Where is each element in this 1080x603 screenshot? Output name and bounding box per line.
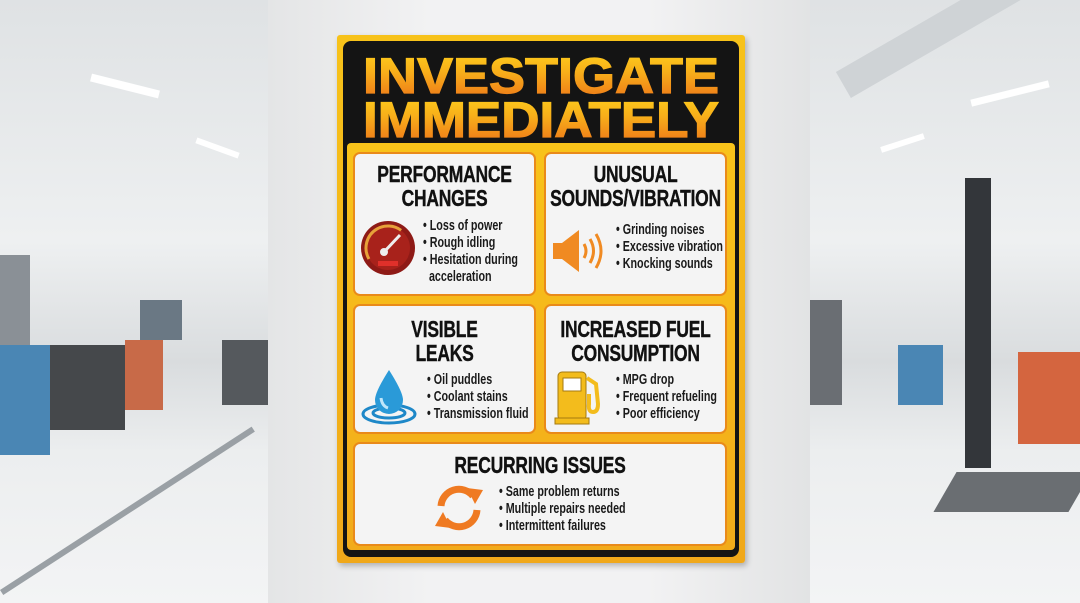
icon: water drop <box>362 370 416 424</box>
panel: unusual sounds <box>544 152 727 296</box>
bullet list: • Multiple repairs needed <box>499 501 626 517</box>
poster <box>337 35 745 563</box>
panel: unusual sounds: UNUSUAL <box>594 161 677 187</box>
panel: visible leaks <box>353 304 536 434</box>
bullet list <box>499 484 626 534</box>
panel: performance changes: PERFORMANCE <box>377 161 512 187</box>
bullet list: • Oil puddles <box>427 372 492 388</box>
bullet list <box>616 222 723 272</box>
background: garage right <box>810 0 1080 603</box>
bullet list: • Loss of power <box>423 218 502 234</box>
bullet list: • MPG drop <box>616 372 674 388</box>
bullet list: • Rough idling <box>423 235 495 251</box>
icon: speedometer <box>361 221 415 275</box>
bullet list: • Same problem returns <box>499 484 620 500</box>
bullet list: • Coolant stains <box>427 389 508 405</box>
bullet list <box>423 218 518 285</box>
panel: visible leaks: VISIBLE <box>411 316 478 342</box>
bullet list: • Grinding noises <box>616 222 704 238</box>
panel: recurring issues <box>353 442 727 546</box>
background: garage left <box>0 0 268 603</box>
bullet list: • Transmission fluid <box>427 406 529 422</box>
panel grid background <box>347 143 735 550</box>
icon: refresh arrows <box>435 486 483 530</box>
bullet list: • Excessive vibration <box>616 239 723 255</box>
bullet list: • Knocking sounds <box>616 256 713 272</box>
background: wall <box>268 0 810 603</box>
title: INVESTIGATE <box>363 48 719 104</box>
title <box>363 48 720 145</box>
bullet list <box>616 372 717 422</box>
panel: increased fuel consumption: INCREASED FUEL <box>560 316 711 342</box>
bullet list: • Intermittent failures <box>499 518 606 534</box>
panel: performance changes: CHANGES <box>402 185 487 211</box>
panel: unusual sounds: SOUNDS/VIBRATION <box>550 185 721 211</box>
panel: performance changes <box>353 152 536 296</box>
bullet list: • Frequent refueling <box>616 389 717 405</box>
bullet list: • Hesitation during <box>423 252 518 268</box>
bullet list: • Poor efficiency <box>616 406 700 422</box>
panel: visible leaks: LEAKS <box>415 340 474 366</box>
panel: increased fuel consumption <box>544 304 727 434</box>
bullet list <box>427 372 529 422</box>
poster black frame <box>343 41 739 557</box>
icon: fuel pump <box>554 372 600 424</box>
panel: increased fuel consumption: CONSUMPTION <box>571 340 700 366</box>
panel: recurring issues: RECURRING ISSUES <box>454 452 626 478</box>
icon: speaker <box>553 230 602 272</box>
bullet list: acceleration <box>429 269 492 285</box>
